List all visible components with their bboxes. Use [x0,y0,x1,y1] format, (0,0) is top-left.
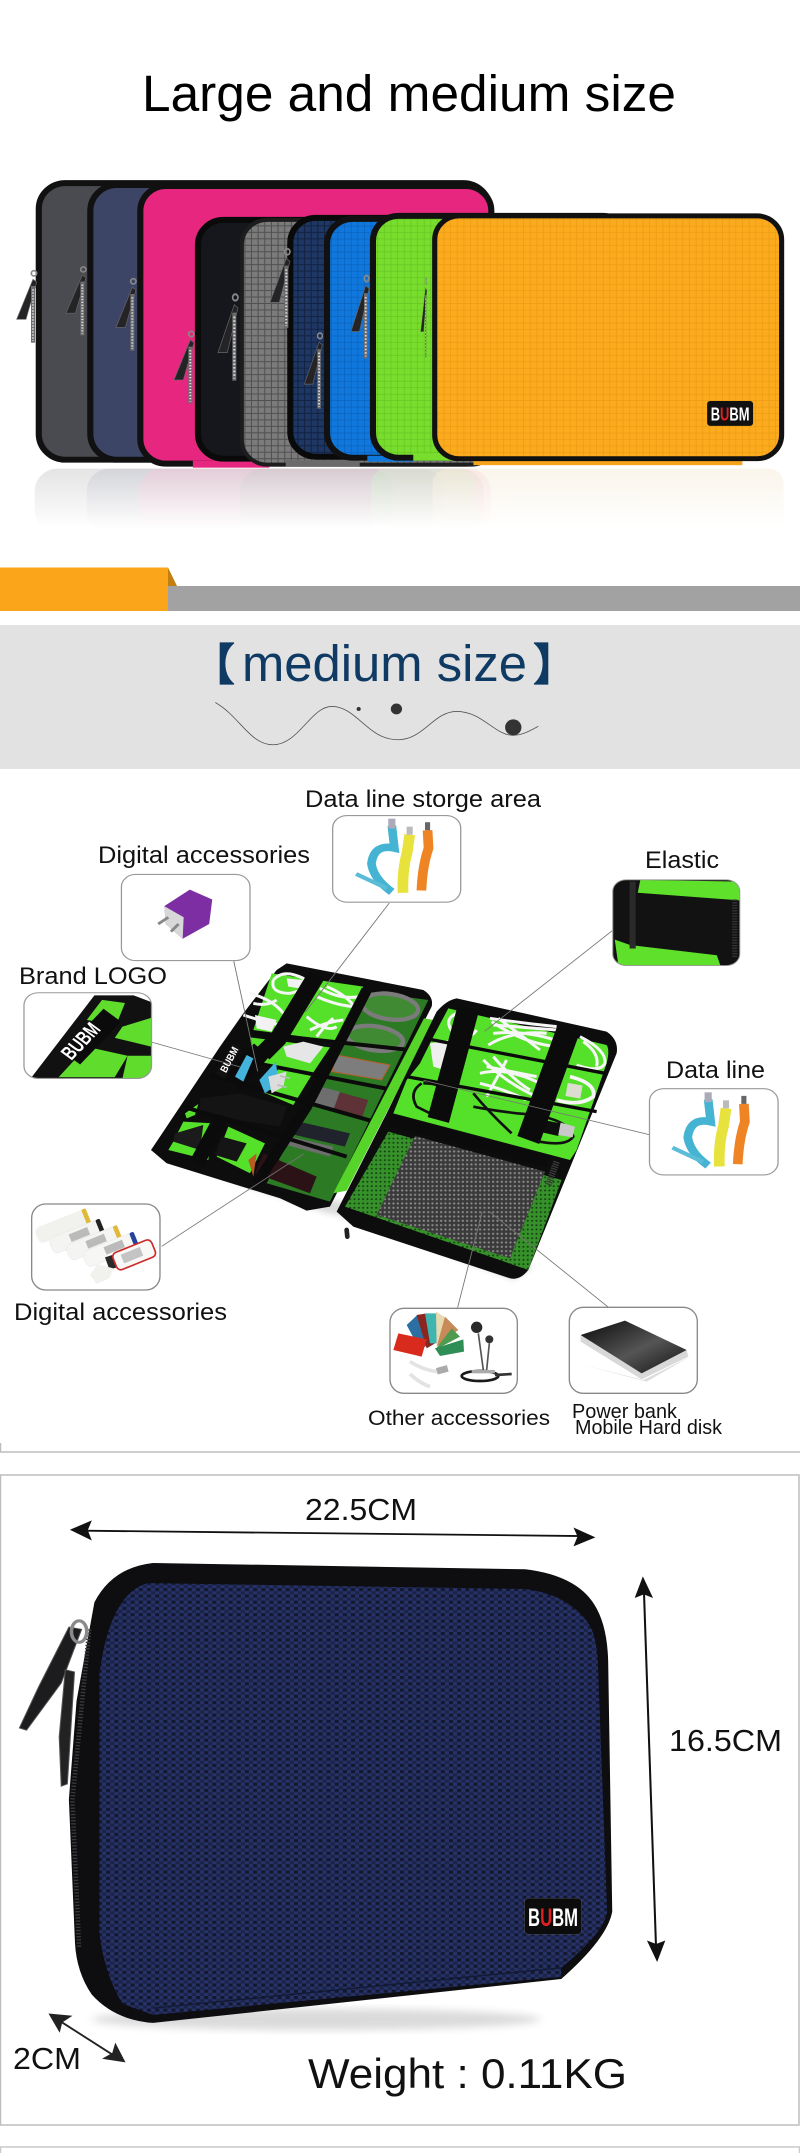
next panel top edge [0,2147,800,2153]
zipper pulls [17,249,427,409]
callout: brand logo [24,993,152,1078]
label: power bank: Power bank [572,1401,678,1423]
bag: denim navy [90,185,487,460]
dimension: height: 16.5CM [669,1723,782,1758]
heading band [0,625,800,769]
white cables [243,974,360,1037]
label: brand logo: Brand LOGO [19,963,167,990]
black devices [200,1093,287,1127]
bag: gray [242,220,497,465]
callout: brand logo: BUBM [57,1019,106,1064]
bag: blue [327,219,582,458]
cable compartments [168,973,363,1173]
black cable [413,1083,573,1143]
callout: elastic [613,880,740,966]
brand badge: BUBM: BUBM [711,405,749,425]
label: data line storage: Data line storge area [305,786,542,813]
heading: medium size: 】 [533,629,577,693]
heading: medium size [191,629,577,693]
callout: usb drives [32,1204,160,1290]
bag: orange [435,216,782,465]
label: mobile hard disk: Mobile Hard disk [575,1417,723,1439]
brand badge: BUBM [524,1898,582,1934]
brand badge: BUBM: BUBM [528,1904,578,1932]
bag: charcoal [39,183,490,460]
right wing [337,998,617,1279]
callout: data line storage [333,816,461,902]
zipper pulls [19,1621,87,1786]
elastic straps [183,975,410,1183]
bag: pink [140,186,491,464]
arrow: thickness [48,2014,126,2062]
panel divider line [0,1443,800,1452]
heading: medium size: medium size [242,635,527,692]
white cables [449,1013,605,1103]
callout: charger [121,874,250,961]
open organizer photo [151,963,617,1280]
arrow: height [635,1576,665,1962]
bag: green [373,216,628,458]
product photo: navy bag [19,1520,665,2062]
brand badge: BUBM [707,401,753,426]
left wing [151,963,432,1211]
strap brand tag: BUBM [219,1045,241,1075]
leader lines [152,903,649,1307]
blue charger on strap [235,1055,253,1082]
bag: dark navy [290,218,545,457]
mesh pocket [345,1132,562,1270]
reflection of bags [31,467,791,539]
title: Large and medium size [142,65,676,122]
label: data line: Data line [666,1057,765,1084]
bag: black [198,220,453,459]
zipper teeth [72,1629,89,1948]
weight: Weight : 0.11KG [308,2050,627,2097]
callout: other accessories [390,1308,517,1393]
dimension: thickness: 2CM [13,2041,81,2076]
label: digital accessories top: Digital accessories [98,842,310,869]
mesh column with pouches [267,992,428,1202]
label: other accessories: Other accessories [368,1407,550,1430]
section ribbon [0,568,800,611]
panel: organizer diagram [14,786,778,1439]
decorative wave with dots [215,702,538,745]
arrow: width [70,1520,595,1546]
spine [333,1018,434,1193]
callout: hard disk [569,1307,697,1393]
heading: medium size: 【 [191,629,235,693]
panel: dimensions [0,1475,799,2125]
product photo: row of colored bags [17,183,791,539]
dimension: width: 22.5CM [305,1492,417,1527]
pouches [360,990,420,1023]
label: digital accessories bottom: Digital accessories [14,1299,227,1326]
elastic straps [407,1008,605,1140]
label: elastic: Elastic [645,847,719,874]
callout: data line [649,1089,778,1175]
